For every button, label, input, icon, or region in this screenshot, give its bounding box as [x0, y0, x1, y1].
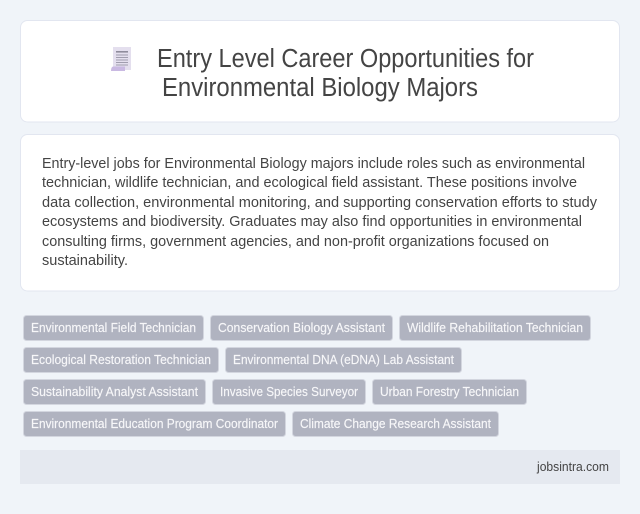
description text: ecosystems and biodiversity. Graduates may also find opportunities in environmental: [42, 214, 582, 230]
tag: [212, 380, 366, 404]
tags: career list: [24, 316, 590, 436]
icon: document scroll: [111, 47, 131, 71]
tag: Environmental Field Technician: [31, 321, 196, 335]
tag: Urban Forestry Technician: [380, 385, 519, 399]
tag: [210, 316, 392, 340]
tag: [372, 380, 526, 404]
tag: Environmental Education Program Coordinator: [31, 417, 278, 431]
tag: [24, 412, 286, 436]
description text: [42, 156, 598, 269]
tag: Environmental DNA (eDNA) Lab Assistant: [233, 353, 454, 367]
tag: [292, 412, 498, 436]
tag: [24, 380, 206, 404]
footer: [20, 450, 620, 484]
tag: Ecological Restoration Technician: [31, 353, 211, 367]
description text: consulting firms, government agencies, and non-profit organizations focused on: [42, 234, 549, 250]
footer source text: jobsintra.com: [536, 460, 609, 474]
tag: [24, 348, 218, 372]
tag: Conservation Biology Assistant: [218, 321, 385, 335]
description text: data collection, environmental monitoring, and supporting conservation efforts to study: [42, 195, 598, 211]
tag: Climate Change Research Assistant: [300, 417, 491, 431]
tag: Sustainability Analyst Assistant: [31, 385, 198, 399]
tag: Wildlife Rehabilitation Technician: [407, 321, 583, 335]
tag: [226, 348, 462, 372]
tag: [400, 316, 590, 340]
title: Environmental Biology Majors: [162, 74, 478, 102]
tag: [24, 316, 204, 340]
title: [157, 45, 534, 102]
tag: Invasive Species Surveyor: [220, 385, 358, 399]
panel: title card: [20, 20, 620, 122]
title: Entry Level Career Opportunities for: [157, 45, 534, 73]
description text: Entry-level jobs for Environmental Biology majors include roles such as environmental: [42, 156, 585, 172]
description text: technician, wildlife technician, and ecological field assistant. These positions involve: [42, 175, 577, 191]
description text: sustainability.: [42, 253, 128, 269]
panel: description: [20, 134, 620, 291]
